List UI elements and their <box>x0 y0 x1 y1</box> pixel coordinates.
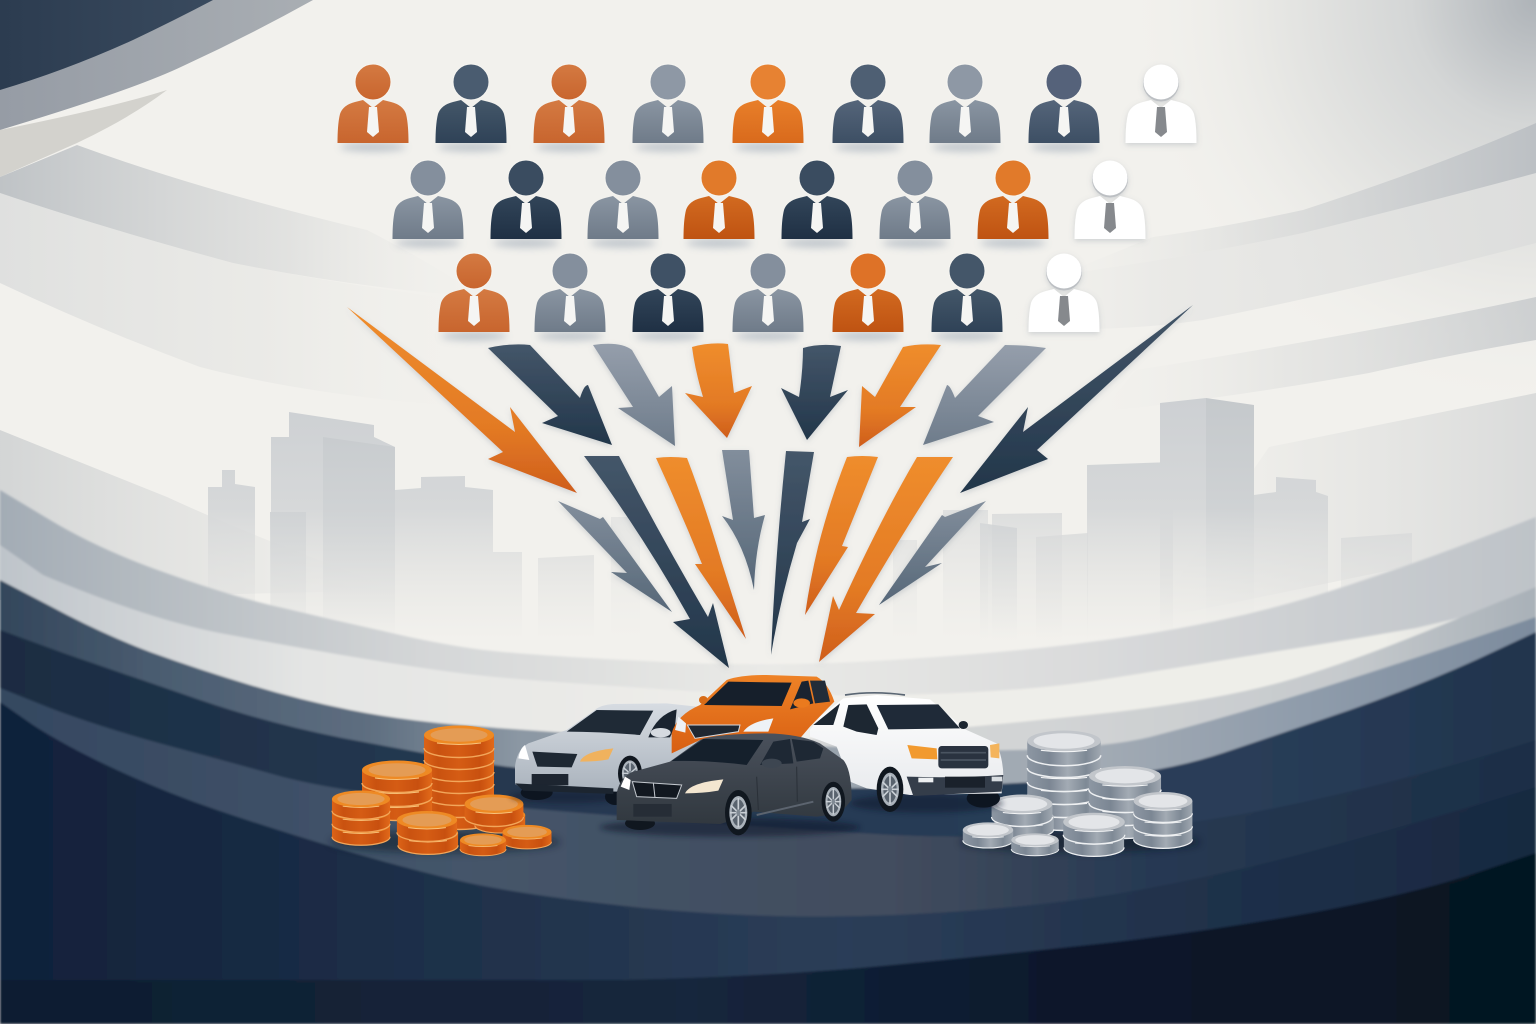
upper left swoosh bands <box>0 145 480 600</box>
person white <box>1028 254 1100 332</box>
person dark orange <box>978 160 1048 248</box>
person slate <box>1028 64 1100 152</box>
person grey <box>392 160 464 248</box>
row 3 of people <box>438 253 1100 340</box>
person dark orange <box>832 253 904 340</box>
arrow: grey <box>923 345 1046 445</box>
person grey <box>632 64 704 152</box>
top-right corner vignette <box>1100 0 1536 430</box>
upper right swoosh bands <box>1000 123 1536 620</box>
person grey <box>930 64 1000 152</box>
arrow: long orange lower right <box>819 457 953 662</box>
arrow: long orange lower <box>656 457 746 639</box>
arrow: small grey lower right <box>879 501 986 605</box>
silver car <box>515 703 697 805</box>
person orange <box>438 253 510 340</box>
person grey <box>732 253 804 340</box>
right silver stack <box>1134 792 1192 848</box>
person white <box>1074 160 1146 239</box>
arrow: small grey lower left <box>558 501 672 612</box>
people grid <box>338 64 1196 340</box>
person dark navy <box>490 160 562 248</box>
orange car <box>672 675 834 753</box>
row 1 of people <box>338 64 1196 152</box>
person white <box>1126 64 1196 143</box>
person dark navy <box>782 160 852 248</box>
arrow: long navy lower <box>584 456 729 668</box>
arrow: grey lower <box>722 450 765 590</box>
arrow: orange <box>685 343 752 438</box>
arrow: orange bolt lower <box>805 456 878 615</box>
arrow: orange <box>859 344 941 447</box>
white SUV <box>810 693 1003 812</box>
lower swoosh layers <box>0 490 1536 1024</box>
person navy <box>436 64 506 152</box>
middle orange stack <box>362 760 432 820</box>
row 2 of people <box>392 160 1146 248</box>
person dark orange <box>684 160 754 248</box>
orange coin stacks <box>330 726 560 856</box>
cars group <box>510 675 1003 837</box>
converging arrows <box>347 305 1193 668</box>
person slate <box>832 64 904 152</box>
person navy <box>932 253 1002 340</box>
left silver coins <box>963 794 1059 856</box>
top-left dark swoosh <box>0 0 313 177</box>
arrow: navy bolt lower <box>771 451 814 655</box>
person bright orange <box>732 64 804 152</box>
right orange coins <box>465 794 552 849</box>
person grey <box>534 253 606 340</box>
front silver stack <box>1063 813 1125 856</box>
arrow: long orange from left <box>347 307 577 493</box>
city skyline right <box>893 398 1412 650</box>
arrow: navy down <box>781 345 848 440</box>
person grey <box>880 160 950 248</box>
tall silver stack <box>1027 731 1101 830</box>
front orange stack <box>397 811 506 856</box>
person orange <box>338 64 408 152</box>
left orange stack <box>332 790 390 845</box>
person grey <box>588 160 658 248</box>
silver coin stacks <box>960 731 1200 856</box>
dark sedan <box>617 733 852 835</box>
city skyline left <box>208 412 640 642</box>
arrow: navy <box>488 344 612 445</box>
arrow: long navy from right <box>960 305 1193 493</box>
person dark navy <box>632 253 704 340</box>
arrow: grey <box>593 344 675 446</box>
tall orange stack <box>424 726 494 830</box>
middle silver stack <box>1089 766 1161 838</box>
person orange <box>534 64 604 152</box>
